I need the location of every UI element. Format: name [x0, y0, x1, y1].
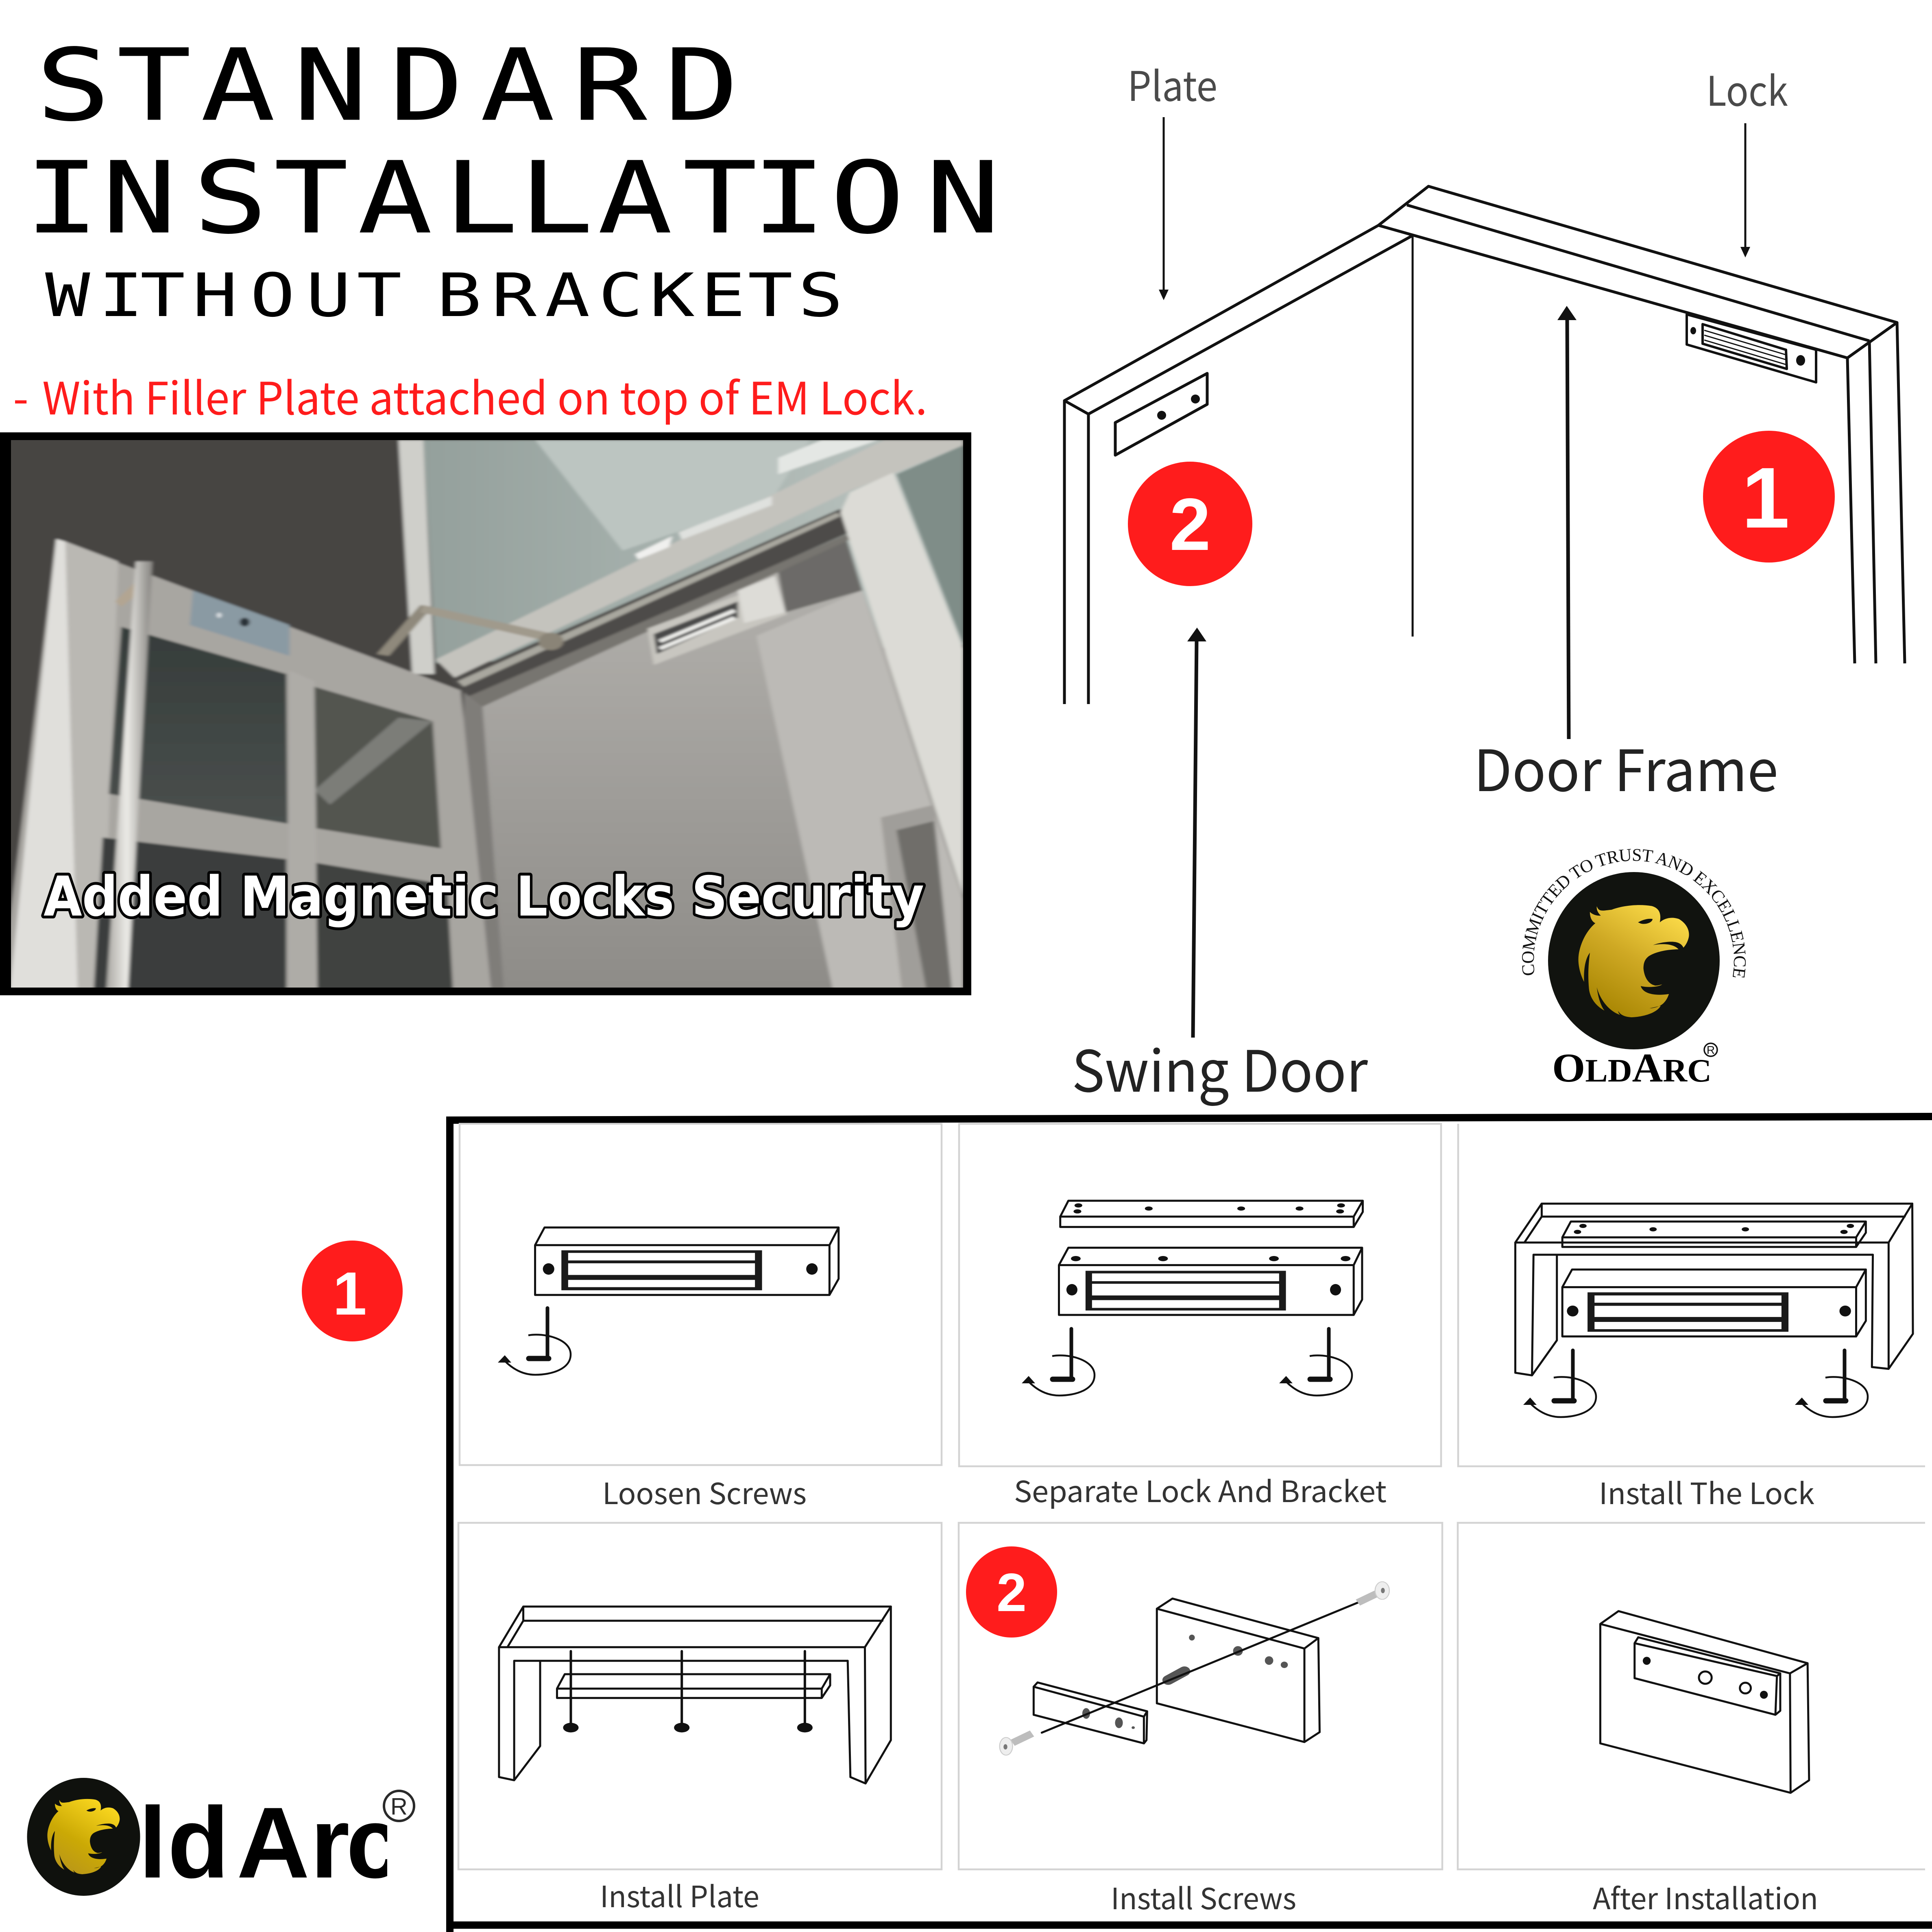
- arrow: Swing Door: [1187, 628, 1206, 1038]
- label: Swing Door: Swing Door: [1072, 1026, 1368, 1108]
- step 2: Separate Lock And Bracket: [959, 1124, 1441, 1511]
- label: Door Frame: Door Frame: [1474, 726, 1778, 808]
- strike plate on door: [1115, 373, 1207, 455]
- logo: Old Arc wordmark: ldArc: [139, 1786, 402, 1899]
- emblem ring text: COMMITTED TO TRUST AND EXCELLENCE: [1518, 845, 1750, 980]
- red note: -: [13, 362, 28, 427]
- step 4: Install Plate: Install Plate: [600, 1873, 759, 1916]
- step 3: Install The Lock: Install The Lock: [1599, 1470, 1814, 1513]
- magnetic lock on frame: [1687, 314, 1816, 382]
- step 1: Loosen Screws: [460, 1124, 942, 1513]
- panel: door photo: [0, 427, 971, 997]
- red note: With Filler Plate attached on top of EM Lock.: [42, 362, 927, 427]
- step 2: Separate Lock And Bracket: Separate Lock And Bracket: [1014, 1468, 1387, 1511]
- door frame diagram: [1064, 186, 1905, 704]
- arrow: Door Frame: [1557, 306, 1577, 739]
- registered mark: R: [390, 1793, 408, 1820]
- badge: 2: 2: [1169, 483, 1211, 566]
- logo: Old Arc wordmark: [27, 1778, 414, 1899]
- badge: 1: 1: [1742, 449, 1790, 546]
- subtitle: WITHOUT BRACKETS: WITHOUT BRACKETS: [45, 261, 843, 330]
- label: Plate: Plate: [1127, 54, 1217, 113]
- step 3: Install The Lock: [1458, 1124, 1925, 1513]
- step 5: Install Screws: Install Screws: [1111, 1875, 1296, 1918]
- title: INSTALLATION: INSTALLATION: [25, 141, 1000, 255]
- photo caption: Added Magnetic Locks Security: [44, 865, 924, 929]
- badge: left 1: [302, 1241, 403, 1341]
- step 1: Loosen Screws: Loosen Screws: [602, 1470, 807, 1513]
- arrow: Plate: [1159, 117, 1169, 300]
- step 6: After Installation: After Installation: [1593, 1875, 1818, 1918]
- emblem registered mark: R: [1707, 1044, 1715, 1056]
- title: STANDARD: STANDARD: [36, 28, 739, 143]
- panel: installation steps: [450, 1116, 1932, 1932]
- arrow: Lock: [1740, 123, 1750, 257]
- badge: step 2: [966, 1546, 1057, 1638]
- label: Lock: Lock: [1706, 59, 1788, 118]
- badge: 2: [1128, 462, 1252, 586]
- logo: OldArc emblem: [1518, 845, 1750, 1090]
- badge: 1: [1703, 431, 1835, 563]
- emblem wordmark: OLDARC: [1552, 1045, 1712, 1090]
- step 5: Install Screws: [959, 1523, 1442, 1918]
- registered mark: [384, 1791, 414, 1821]
- step 6: After Installation: [1458, 1523, 1925, 1918]
- emblem registered mark: [1704, 1043, 1717, 1056]
- badge: left 1: 1: [333, 1259, 367, 1328]
- badge: step 2: 2: [997, 1563, 1027, 1623]
- step 4: Install Plate: [458, 1523, 942, 1916]
